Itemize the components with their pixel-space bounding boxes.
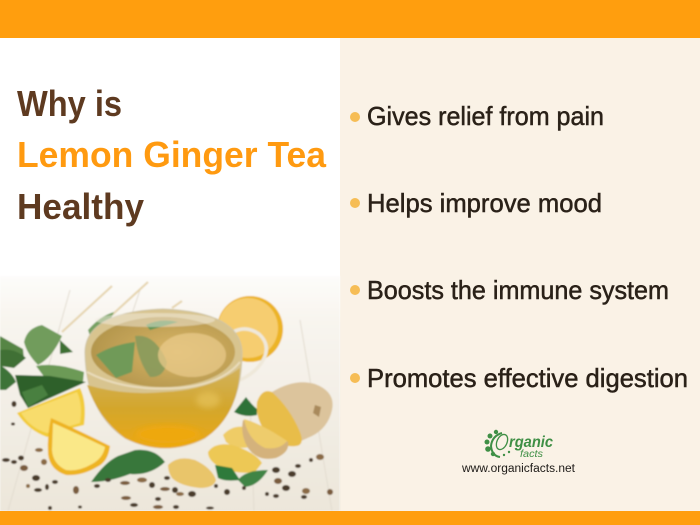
photo: lemon half behind the cup [217, 296, 283, 362]
logo wordmark: Organic: rganic [509, 434, 553, 451]
photo: lemon wedges [17, 388, 110, 475]
website url: www.organicfacts.net [461, 463, 576, 475]
title [17, 83, 327, 227]
photo: mint sprig front right [215, 465, 268, 487]
photo: mint leaves left [0, 312, 114, 408]
logo: Organic Facts [461, 430, 576, 475]
logo wordmark: facts: facts [520, 449, 543, 460]
benefit: immune system: Boosts the immune system [367, 275, 669, 305]
photo: ginger slices [168, 419, 288, 488]
icon: leafy O [484, 430, 510, 457]
benefit: digestion: Promotes effective digestion [367, 363, 688, 393]
benefit: mood: Helps improve mood [367, 188, 602, 218]
photo: wooden table [0, 276, 340, 511]
photo: glass cup of tea [85, 309, 266, 448]
panel: right benefits background [340, 38, 700, 511]
title line: Lemon Ginger Tea: Lemon Ginger Tea [17, 134, 327, 175]
photo: scattered tea specks [2, 401, 333, 510]
photo: leaf beside ginger [234, 397, 257, 416]
bottom orange bar [0, 511, 700, 525]
title line: Healthy: Healthy [17, 186, 144, 227]
photo: straw sticks [62, 282, 182, 332]
benefit: pain relief: Gives relief from pain [367, 101, 604, 131]
photo: lemon ginger tea [0, 276, 340, 511]
photo: whole ginger root [257, 382, 333, 446]
title line: Why is: Why is [17, 83, 122, 124]
benefits list [350, 101, 688, 393]
top orange bar [0, 0, 700, 38]
photo: mint sprig front left [91, 450, 165, 482]
